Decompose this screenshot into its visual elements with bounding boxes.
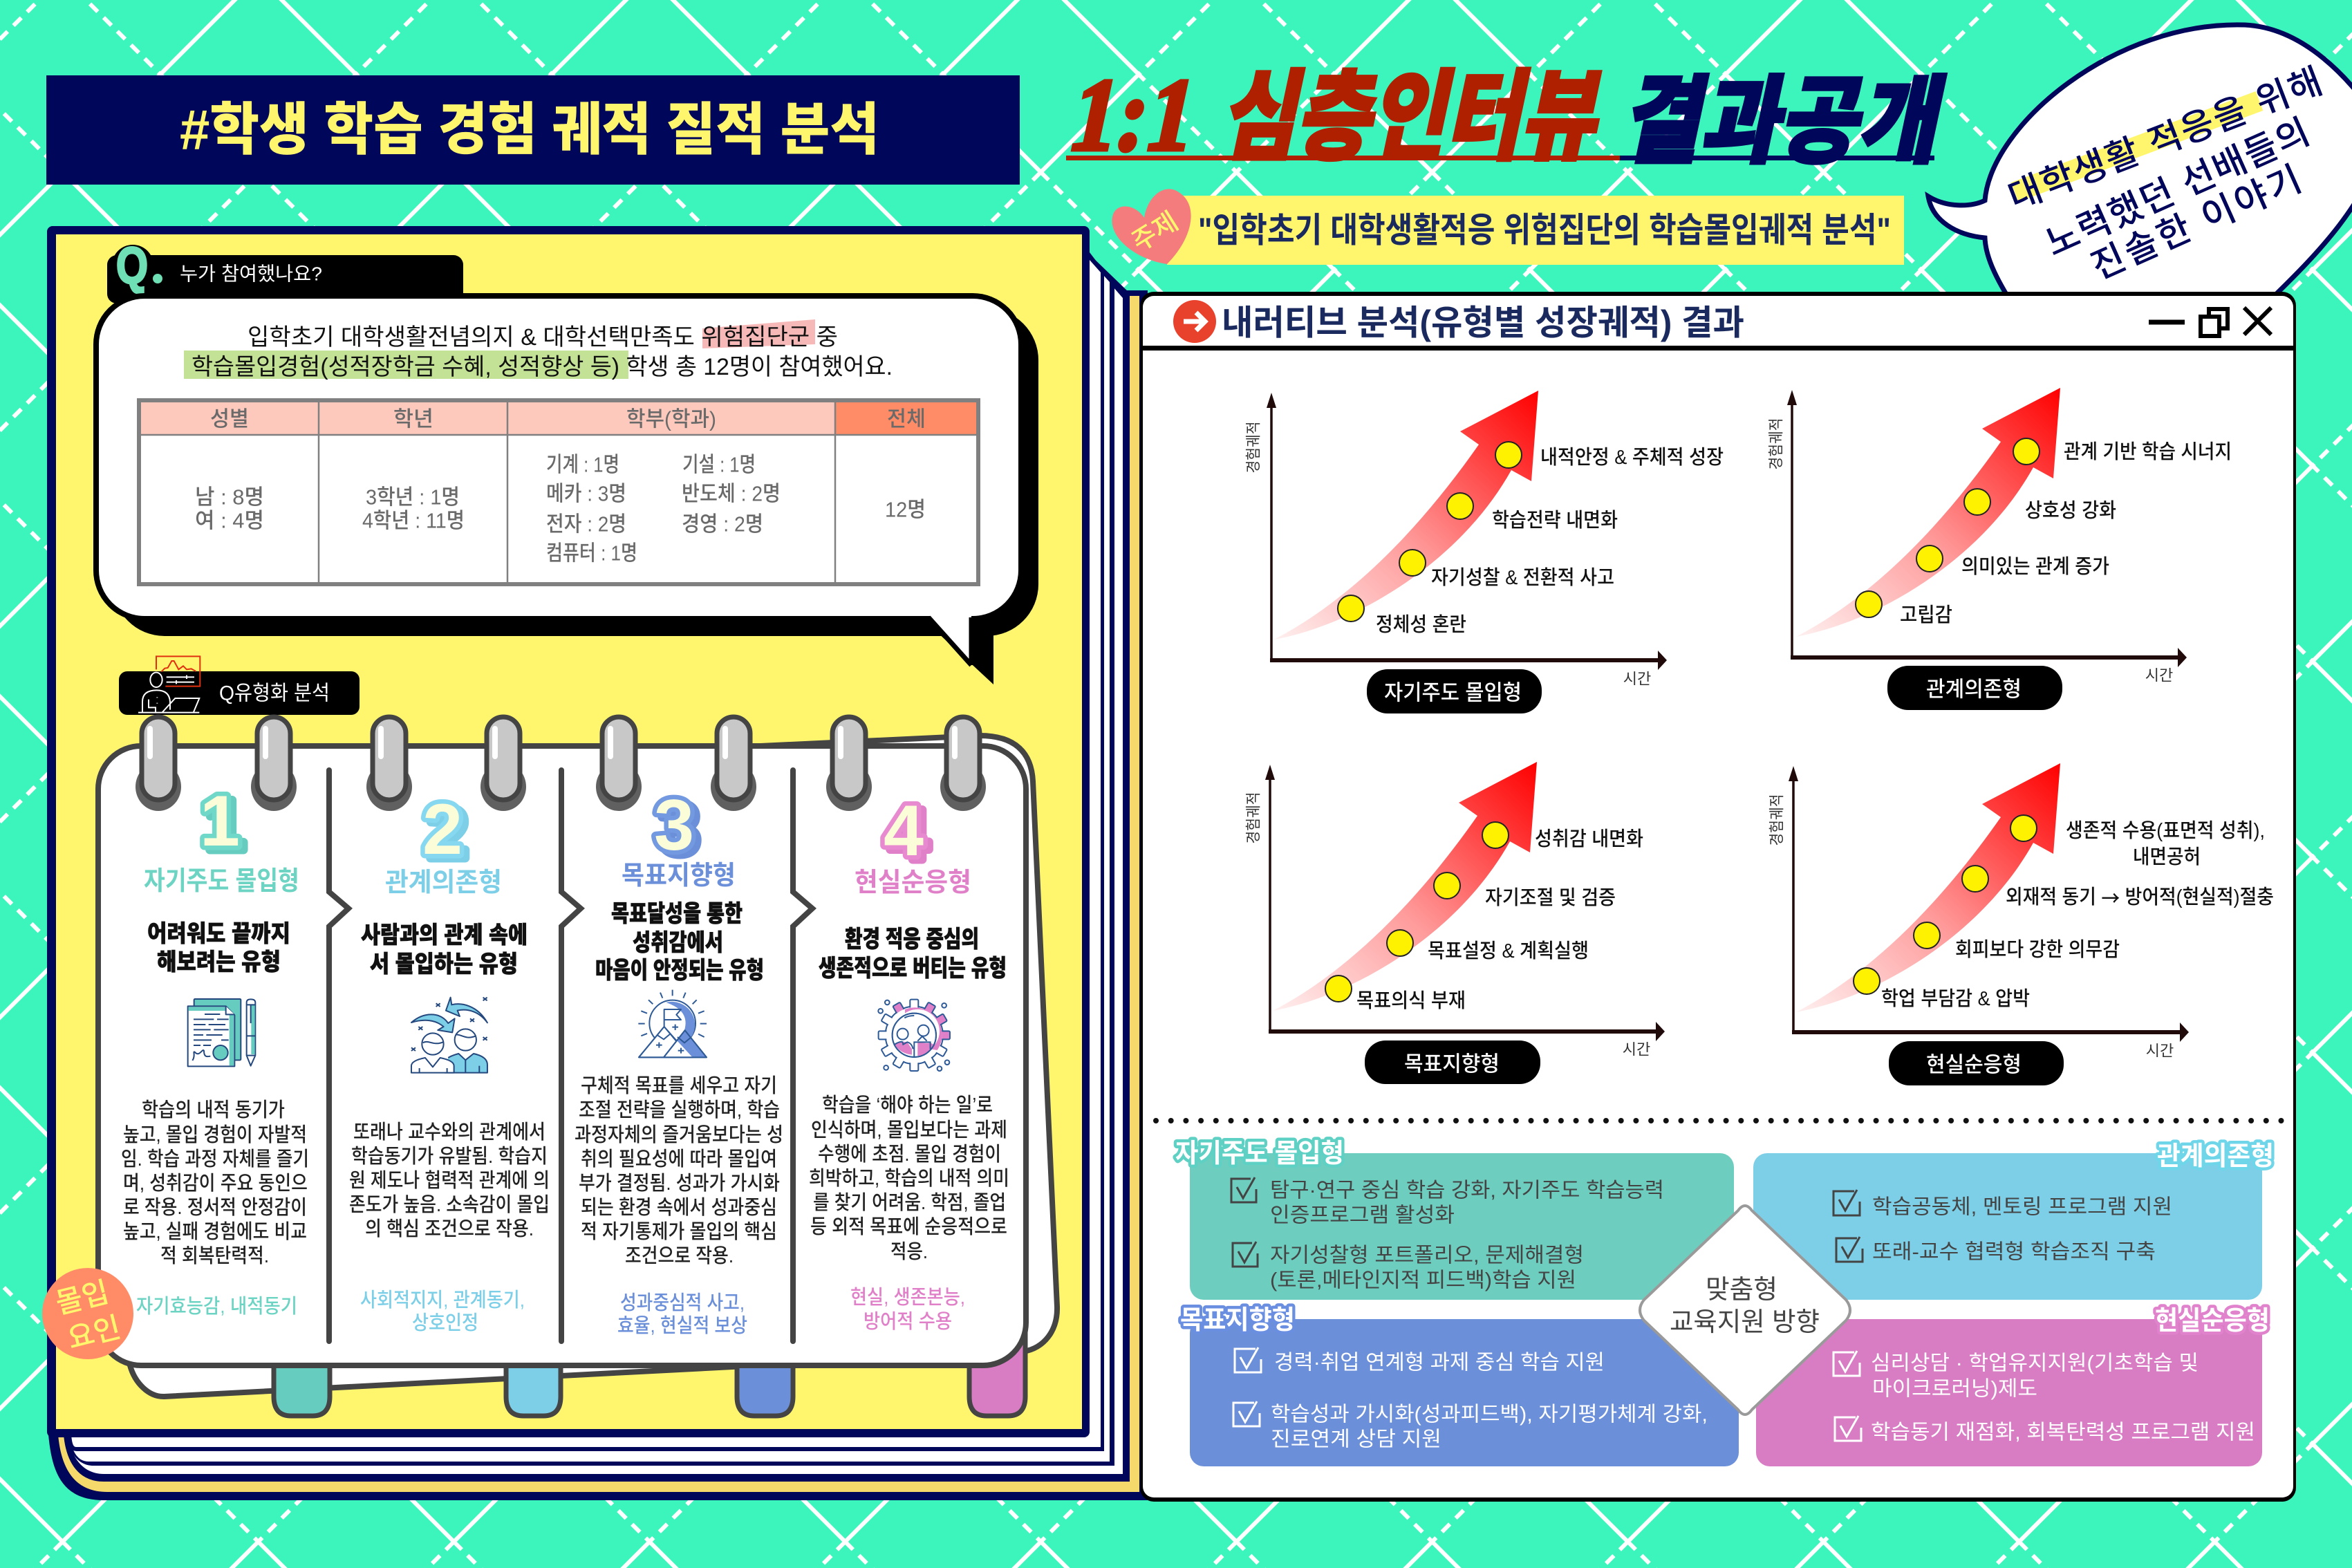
chart: self-directed — [1244, 391, 1724, 713]
icon: analyst with laptop — [138, 656, 200, 713]
participants table — [137, 398, 980, 586]
support panel: relationship: 또래-교수 협력형 학습조직 구축 — [1872, 1240, 2156, 1264]
chart: reality-conforming: 생존적 수용(표면적 성취), — [2066, 819, 2265, 842]
type 1 column: self-directed: 로 작용. 정서적 안정감이 — [123, 1196, 307, 1219]
number 1: 1 — [205, 785, 245, 866]
speech bubble: 진솔한 이야기 — [2085, 159, 2308, 288]
support panel: goal-oriented — [1180, 1306, 1739, 1466]
type 4 column: reality-conforming: 희박하고, 학습의 내적 의미 — [809, 1167, 1009, 1190]
support panel: reality-conforming: 마이크로러닝)제도 — [1872, 1377, 2037, 1401]
Q tab: typology: Q유형화 분석 — [219, 682, 330, 705]
participants table: 경영 : 2명 — [682, 512, 763, 536]
support panel: goal-oriented: 진로연계 상담 지원 — [1271, 1428, 1441, 1450]
chart: reality-conforming: 현실순응형 — [1926, 1052, 2022, 1077]
chart: goal-oriented: 시간 — [1623, 1041, 1650, 1058]
growth arrow — [1796, 763, 2060, 1012]
main title — [1061, 57, 1954, 175]
type 3 column: goal-oriented: 마음이 안정되는 유형 — [595, 958, 764, 984]
type 1 column: self-directed: 임. 학습 과정 자체를 즐기 — [121, 1148, 309, 1170]
notebook column dividers — [329, 770, 812, 1341]
type 1 column: self-directed: 자기효능감, 내적동기 — [136, 1295, 297, 1318]
support panel: relationship — [1753, 1142, 2274, 1300]
chart: self-directed: 정체성 혼란 — [1376, 613, 1466, 636]
type 3 column: goal-oriented: 과정자체의 즐거움보다는 성 — [575, 1123, 783, 1146]
support panel: goal-oriented: 경력·취업 연계형 과제 중심 학습 지원 — [1274, 1351, 1605, 1374]
support panel: reality-conforming: 학습동기 재점화, 회복탄력성 프로그램 지원 — [1871, 1421, 2255, 1444]
type 4 column: reality-conforming: 현실순응형 — [855, 868, 971, 897]
participants table: 12명 — [885, 498, 926, 521]
Q tab: typology — [119, 656, 360, 715]
type 1 column: self-directed: 자기주도 몰입형 — [144, 867, 299, 896]
type 4 column: reality-conforming: 인식하며, 몰입보다는 과제 — [811, 1119, 1007, 1141]
speech panel: participants: 입학초기 대학생활전념의지 & 대학선택만족도 위험집단군 중 — [248, 324, 838, 351]
participants table: 반도체 : 2명 — [682, 481, 781, 506]
main title: 결과공개 — [1616, 68, 1954, 175]
type 3 column: goal-oriented: 목표지향형 — [622, 861, 736, 890]
support panel: self-directed: 인증프로그램 활성화 — [1270, 1204, 1455, 1226]
participants table: 학부(학과) — [626, 407, 716, 431]
chart: relationship-dependent: 상호성 강화 — [2025, 500, 2116, 522]
support panel: reality-conforming: 현실순응형 — [2155, 1307, 2270, 1336]
chart: self-directed: 내적안정 & 주체적 성장 — [1540, 446, 1724, 469]
speech bubble: 대학생활 적응을 위해 — [2003, 62, 2328, 218]
participants table: 3학년 : 1명 — [366, 485, 460, 509]
support panel: reality-conforming: 심리상담 · 학업유지지원(기초학습 및 — [1871, 1352, 2199, 1374]
type 4 column: reality-conforming: 학습을 ‘해야 하는 일’로 — [822, 1094, 993, 1117]
chart: reality-conforming: 회피보다 강한 의무감 — [1955, 938, 2120, 961]
icon: mountain and flag — [638, 990, 707, 1057]
notebook rings — [136, 717, 986, 811]
support panel: self-directed: 탐구·연구 중심 학습 강화, 자기주도 학습능력 — [1270, 1179, 1664, 1202]
notebook colour tabs — [274, 1314, 1025, 1416]
type 1 column: self-directed: 며, 성취감이 주요 동인으 — [123, 1172, 308, 1195]
Q tab: who participated — [107, 236, 463, 304]
support panel: reality-conforming — [1756, 1307, 2270, 1466]
participants table: 컴퓨터 : 1명 — [546, 541, 637, 566]
icon: gear with people — [878, 1000, 950, 1071]
type 4 column: reality-conforming: 수행에 초점. 몰입 경험이 — [818, 1143, 1001, 1166]
type 3 column: goal-oriented: 적 자기통제가 몰입의 핵심 — [581, 1220, 777, 1243]
participants table: 학년 — [393, 407, 433, 431]
type 1 column: self-directed: 높고, 몰입 경험이 자발적 — [123, 1123, 307, 1146]
Q tab: who participated: 누가 참여했나요? — [180, 263, 322, 285]
chart: goal-oriented: 목표의식 부재 — [1356, 989, 1466, 1012]
type 3 column: goal-oriented: 효율, 현실적 보상 — [617, 1314, 747, 1337]
participants table: 메카 : 3명 — [546, 481, 626, 506]
checkbox — [1231, 1177, 1256, 1202]
chart: goal-oriented: 목표지향형 — [1404, 1052, 1500, 1076]
book page layers — [48, 252, 1148, 1500]
type 2 column: relationship: 학습동기가 유발됨. 학습지 — [351, 1145, 548, 1168]
chart: self-directed: 경험궤적 — [1244, 422, 1262, 473]
type 2 column: relationship: 상호인정 — [412, 1312, 478, 1334]
notebook back sheet — [130, 736, 1057, 1397]
chart: relationship-dependent: 시간 — [2145, 666, 2173, 684]
chart: goal-oriented: 자기조절 및 검증 — [1485, 886, 1616, 909]
icon: two people with arrows — [411, 998, 487, 1073]
chart: goal-oriented: 성취감 내면화 — [1535, 828, 1643, 850]
type 4 column: reality-conforming: 환경 적응 중심의 — [845, 926, 979, 953]
checkbox — [1233, 1401, 1260, 1426]
type 4 column: reality-conforming — [809, 791, 1009, 1333]
support panel: self-directed: 자기성찰형 포트폴리오, 문제해결형 — [1270, 1244, 1584, 1267]
narrative analysis window: 내러티브 분석(유형별 성장궤적) 결과 — [1222, 304, 1744, 342]
flow factor badge: 요인 — [64, 1311, 124, 1355]
type 3 column: goal-oriented: 취의 필요성에 따라 몰입여 — [581, 1148, 777, 1170]
narrative analysis window — [1140, 292, 2296, 1502]
type 4 column: reality-conforming: 등 외적 목표에 순응적으로 — [810, 1215, 1007, 1238]
chart: relationship-dependent: 의미있는 관계 증가 — [1961, 555, 2109, 578]
type 2 column: relationship: 또래나 교수와의 관계에서 — [353, 1121, 545, 1144]
type 2 column: relationship: 서 몰입하는 유형 — [370, 951, 518, 978]
type 4 column: reality-conforming: 생존적으로 버티는 유형 — [819, 955, 1007, 982]
icon: heart badge: 주제 — [1127, 207, 1184, 257]
chart: reality-conforming: 시간 — [2146, 1043, 2174, 1059]
number 2: 2 — [428, 794, 468, 874]
participants table: 기설 : 1명 — [682, 452, 756, 477]
type 4 column: reality-conforming: 적응. — [890, 1240, 928, 1263]
type 3 column: goal-oriented: 조절 전략을 실행하며, 학습 — [579, 1099, 780, 1121]
type 2 column: relationship — [349, 790, 550, 1334]
chart: relationship-dependent: 관계의존형 — [1926, 678, 2022, 701]
chart: relationship-dependent: 관계 기반 학습 시너지 — [2064, 440, 2232, 463]
window controls — [2149, 308, 2271, 336]
icon: documents and pen — [188, 999, 255, 1066]
type 1 column: self-directed: 학습의 내적 동기가 — [142, 1099, 285, 1121]
type 3 column: goal-oriented — [575, 785, 783, 1337]
type 3 column: goal-oriented: 되는 환경 속에서 성과중심 — [581, 1196, 777, 1219]
participants table: 전자 : 2명 — [546, 512, 626, 536]
speech bubble: 노력했던 선배들의 — [2040, 112, 2316, 264]
checkbox — [1833, 1351, 1860, 1376]
checkbox — [1833, 1190, 1860, 1215]
type 4 column: reality-conforming: 방어적 수용 — [864, 1310, 952, 1333]
center diamond: tailored support: 교육지원 방향 — [1670, 1308, 1820, 1337]
type 1 column: self-directed — [121, 781, 309, 1318]
title banner — [46, 75, 1020, 185]
type 1 column: self-directed: 어려워도 끝까지 — [147, 921, 290, 947]
growth arrow — [1796, 388, 2060, 637]
type 2 column: relationship: 존도가 높음. 소속감이 몰입 — [349, 1193, 550, 1216]
chart: goal-oriented — [1244, 762, 1665, 1084]
type 3 column: goal-oriented: 성취감에서 — [633, 930, 723, 956]
number 2: 2 — [422, 790, 463, 870]
type 3 column: goal-oriented: 목표달성을 통한 — [611, 901, 743, 927]
center diamond: tailored support — [1640, 1206, 1850, 1415]
chart: self-directed: 시간 — [1623, 671, 1651, 687]
title banner: #학생 학습 경험 궤적 질적 분석 — [180, 98, 879, 162]
checkbox — [1836, 1237, 1863, 1262]
support panel: self-directed: 자기주도 몰입형 — [1175, 1139, 1344, 1168]
support panel: relationship: 관계의존형 — [2157, 1142, 2274, 1171]
participants table: 여 : 4명 — [195, 509, 264, 532]
type 2 column: relationship: 관계의존형 — [385, 868, 502, 897]
chart: relationship-dependent: 고립감 — [1900, 604, 1952, 626]
type 4 column: reality-conforming: 를 찾기 어려움. 학점, 졸업 — [813, 1191, 1006, 1214]
type 3 column: goal-oriented: 조건으로 작용. — [625, 1244, 734, 1267]
checkbox — [1233, 1242, 1258, 1267]
chart: self-directed: 자기성찰 & 전환적 사고 — [1431, 566, 1614, 589]
growth arrow — [1274, 391, 1538, 640]
participants table: 전체 — [887, 407, 926, 431]
number 3: 3 — [660, 790, 700, 870]
chart: reality-conforming: 경험궤적 — [1768, 794, 1785, 846]
number 3: 3 — [654, 785, 694, 866]
type 1 column: self-directed: 높고, 실패 경험에도 비교 — [123, 1220, 307, 1243]
checkbox — [1835, 1416, 1861, 1441]
type 2 column: relationship: 사람과의 관계 속에 — [361, 922, 528, 949]
number 4: 4 — [884, 791, 924, 871]
type 2 column: relationship: 사회적지지, 관계동기, — [360, 1289, 525, 1312]
type 3 column: goal-oriented: 부가 결정됨. 성과가 가시화 — [579, 1172, 780, 1195]
type 3 column: goal-oriented: 성과중심적 사고, — [620, 1291, 745, 1314]
chart: goal-oriented: 경험궤적 — [1244, 792, 1262, 843]
number 1: 1 — [200, 781, 240, 861]
main title: 1:1 — [1061, 57, 1207, 172]
chart: relationship-dependent: 경험궤적 — [1767, 418, 1785, 470]
growth arrow — [1273, 762, 1537, 1011]
chart: self-directed: 자기주도 몰입형 — [1384, 680, 1522, 705]
support panel: relationship: 학습공동체, 멘토링 프로그램 지원 — [1872, 1196, 2172, 1218]
chart: reality-conforming: 학업 부담감 & 압박 — [1881, 987, 2030, 1010]
Q tab: who participated: Q — [116, 236, 148, 295]
participants table: 성별 — [210, 407, 249, 431]
book cover panel — [47, 226, 1090, 1437]
notebook main page — [98, 746, 1026, 1365]
chart: reality-conforming — [1768, 763, 2274, 1085]
chart: relationship-dependent — [1767, 388, 2232, 710]
support panel: self-directed: (토론,메타인지적 피드백)학습 지원 — [1270, 1269, 1576, 1291]
flow factor badge: 몰입 — [53, 1276, 112, 1320]
chart: self-directed: 학습전략 내면화 — [1492, 509, 1618, 532]
center diamond: tailored support: 맞춤형 — [1706, 1276, 1777, 1305]
type 4 column: reality-conforming: 현실, 생존본능, — [850, 1286, 965, 1309]
topic strip: "입학초기 대학생활적응 위험집단의 학습몰입궤적 분석" — [1198, 211, 1891, 250]
icon: heart badge — [1112, 189, 1191, 264]
checkbox — [1235, 1347, 1261, 1372]
chart: reality-conforming: 외재적 동기 → 방어적(현실적)절충 — [2006, 883, 2274, 912]
main title: 심층인터뷰 — [1215, 63, 1614, 172]
support panel: goal-oriented: 학습성과 가시화(성과피드백), 자기평가체계 강화, — [1271, 1403, 1708, 1426]
chart: goal-oriented: 목표설정 & 계획실행 — [1428, 940, 1589, 962]
speech bubble — [1928, 25, 2352, 308]
support panel: goal-oriented: 목표지향형 — [1180, 1306, 1295, 1335]
speech panel: participants — [96, 296, 1038, 684]
participants table: 남 : 8명 — [195, 485, 264, 509]
topic strip — [1112, 189, 1904, 265]
type 2 column: relationship: 원 제도나 협력적 관계에 의 — [349, 1169, 550, 1192]
type 2 column: relationship: 의 핵심 조건으로 작용. — [365, 1217, 534, 1240]
icon: red arrow circle — [1173, 300, 1216, 343]
participants table: 기계 : 1명 — [546, 452, 619, 477]
type 1 column: self-directed: 해보려는 유형 — [157, 949, 281, 976]
participants table: 4학년 : 11명 — [362, 509, 465, 532]
flow factor badge — [42, 1268, 133, 1359]
type 1 column: self-directed: 적 회복탄력적. — [160, 1244, 269, 1267]
support panel: self-directed — [1175, 1139, 1734, 1300]
type 3 column: goal-oriented: 구체적 목표를 세우고 자기 — [581, 1074, 777, 1097]
chart: reality-conforming: 내면공허 — [2133, 846, 2201, 868]
number 4: 4 — [889, 795, 929, 875]
speech panel: participants: 학습몰입경험(성적장학금 수혜, 성적향상 등) 학생 총 12명이 참여했어요. — [192, 354, 893, 380]
